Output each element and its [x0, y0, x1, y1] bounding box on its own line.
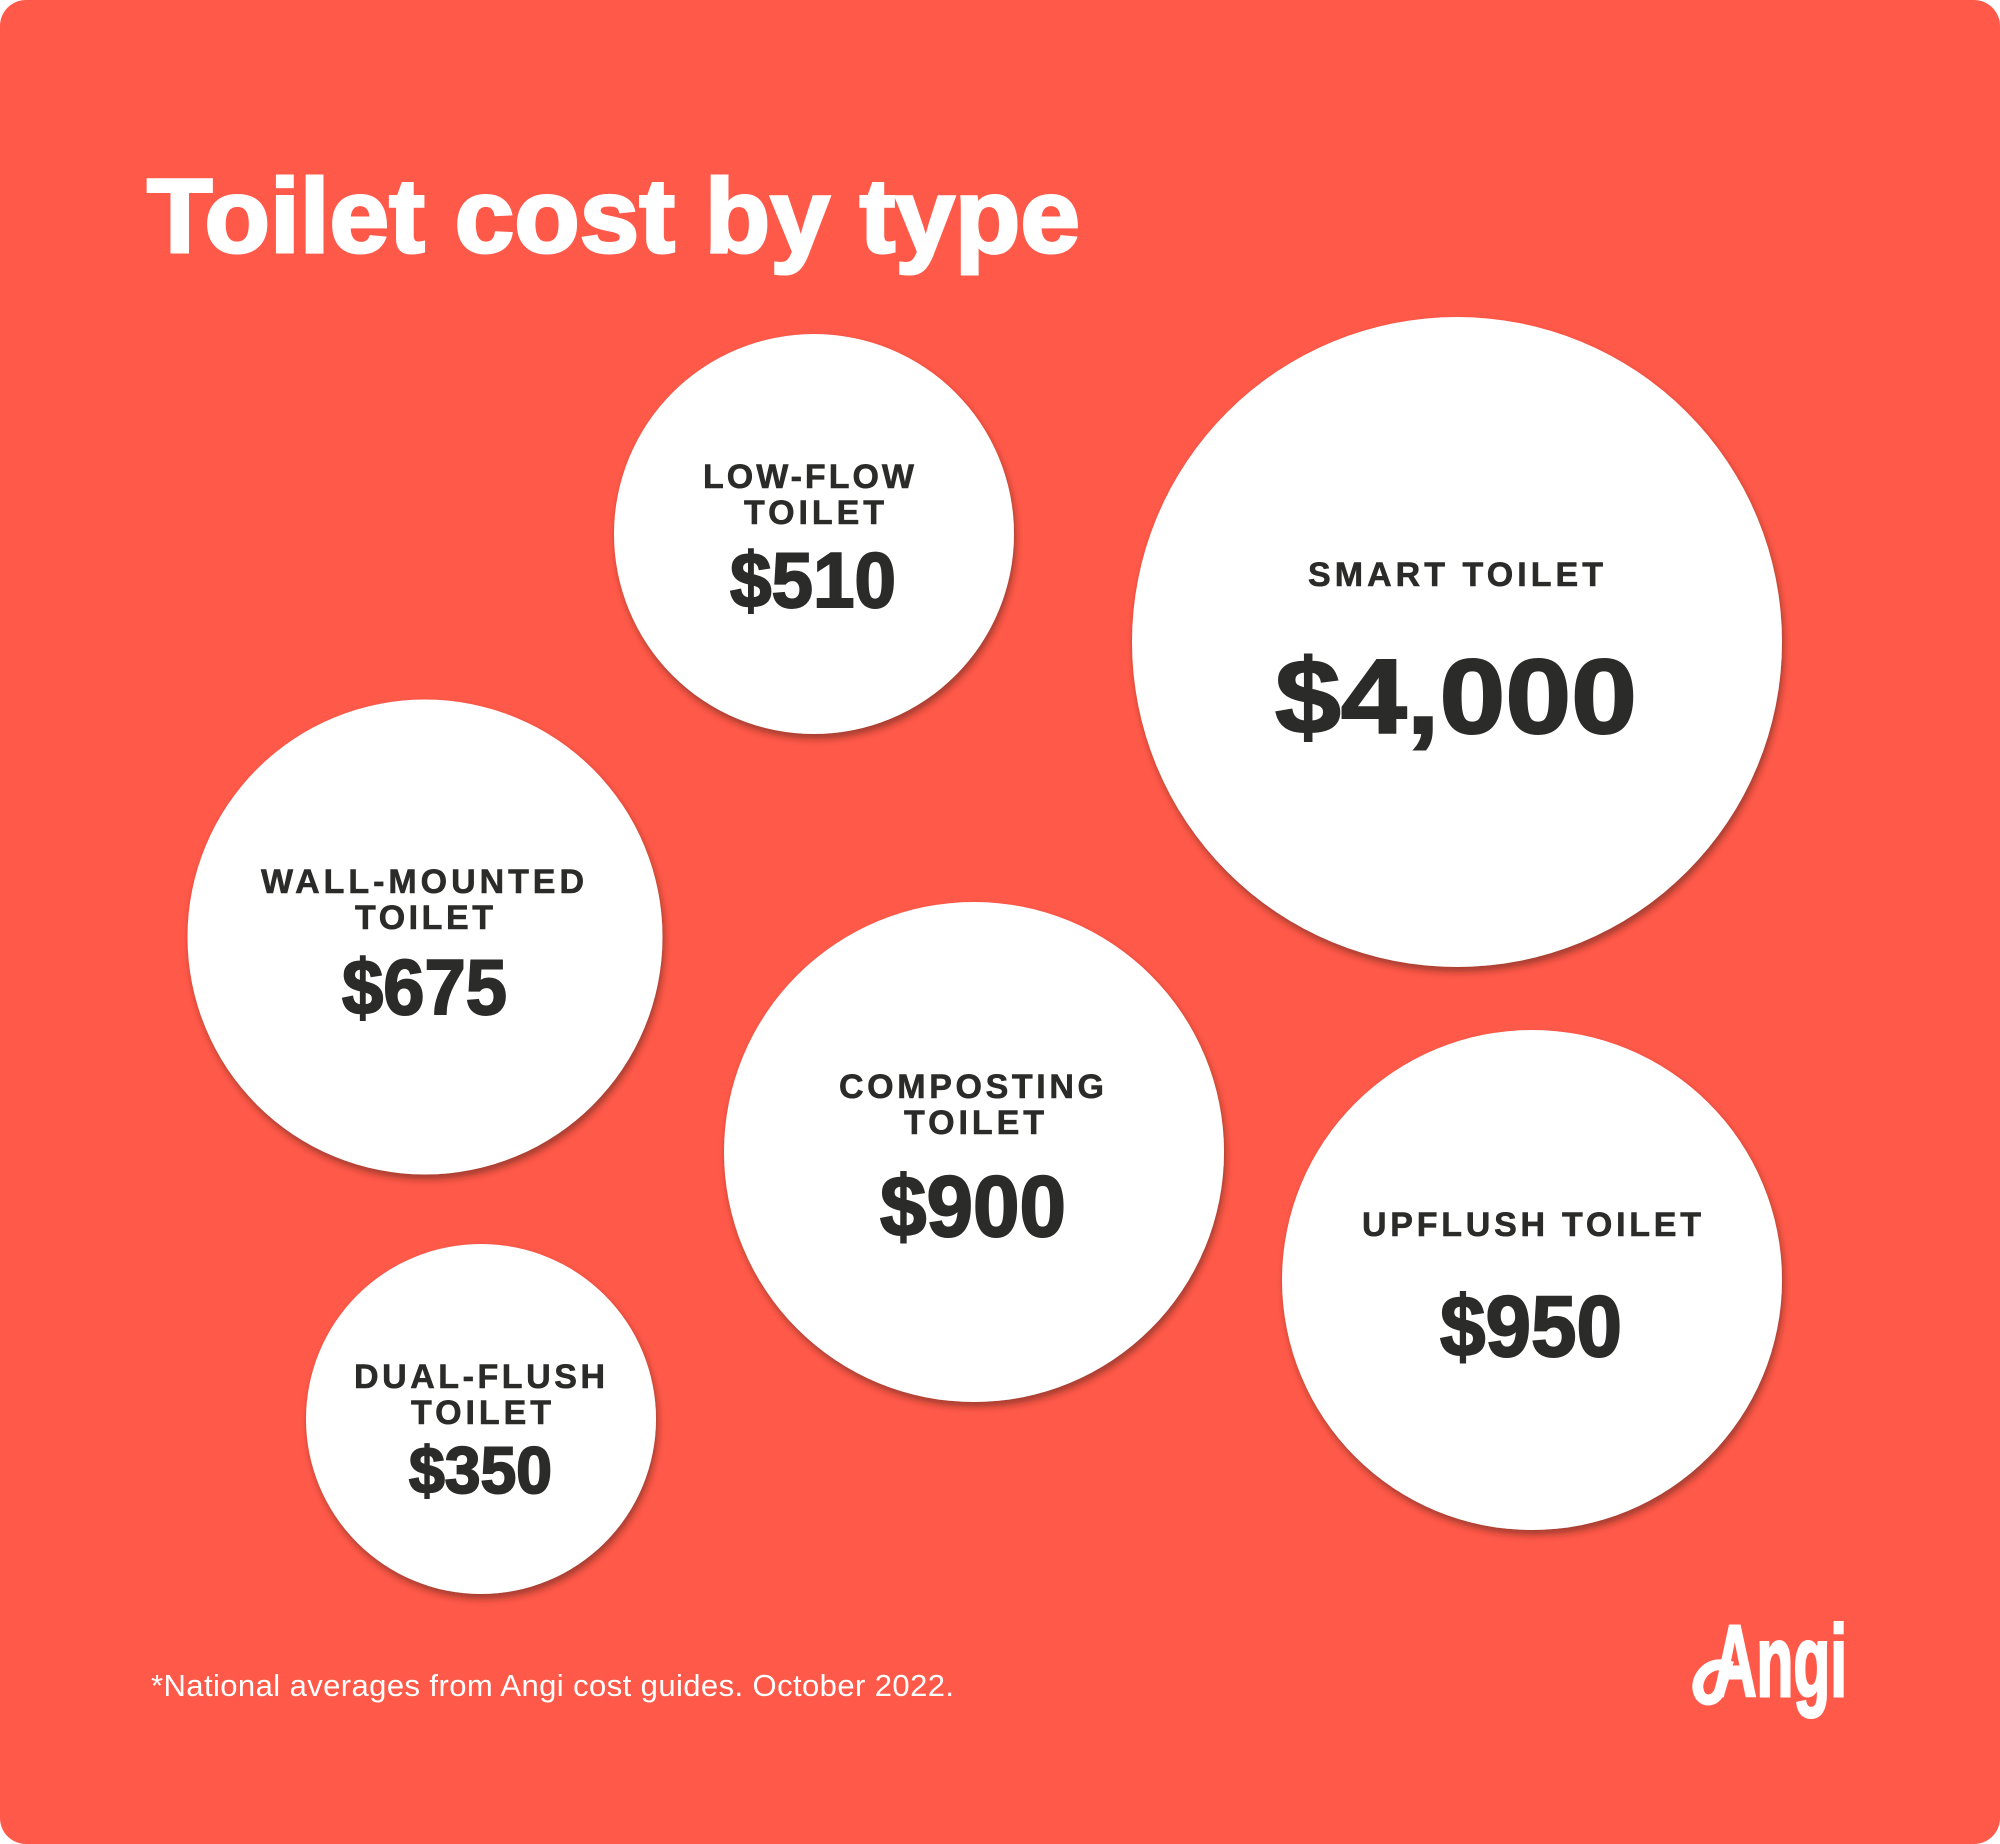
- footnote: *National averages from Angi cost guides. October 2022.: [151, 1668, 954, 1703]
- bubble: smart toilet: SMART TOILET: [1308, 556, 1603, 594]
- bubble: smart toilet: $4,000: [1275, 638, 1637, 756]
- title: Toilet cost by type: [147, 158, 1080, 275]
- bubble: wall-mounted toilet: [188, 700, 662, 1174]
- bubble: dual-flush toilet: DUAL-FLUSH: [354, 1358, 605, 1396]
- bubble: composting toilet: $900: [880, 1159, 1066, 1255]
- bubble: dual-flush toilet: TOILET: [411, 1394, 551, 1432]
- bubble: low-flow toilet: TOILET: [744, 494, 884, 532]
- logo: Angi: Angi: [1713, 1606, 1847, 1718]
- bubble: wall-mounted toilet: $675: [342, 943, 507, 1031]
- bubble: composting toilet: TOILET: [904, 1104, 1044, 1142]
- bubble: wall-mounted toilet: WALL-MOUNTED: [261, 863, 584, 901]
- logo: Angi: [1698, 1606, 1847, 1718]
- bubble: composting toilet: [724, 902, 1224, 1402]
- bubble: low-flow toilet: LOW-FLOW: [703, 458, 915, 496]
- bubble: wall-mounted toilet: TOILET: [355, 899, 493, 937]
- bubble: upflush toilet: $950: [1440, 1279, 1622, 1375]
- bubble: upflush toilet: [1282, 1030, 1782, 1530]
- bubble: low-flow toilet: $510: [730, 536, 896, 624]
- bubble: smart toilet: [1132, 317, 1782, 967]
- bubble: dual-flush toilet: [306, 1244, 656, 1594]
- bubble: low-flow toilet: [614, 334, 1014, 734]
- bubble: composting toilet: COMPOSTING: [839, 1068, 1104, 1106]
- bubble: upflush toilet: UPFLUSH TOILET: [1362, 1206, 1701, 1244]
- bubble: dual-flush toilet: $350: [409, 1433, 552, 1507]
